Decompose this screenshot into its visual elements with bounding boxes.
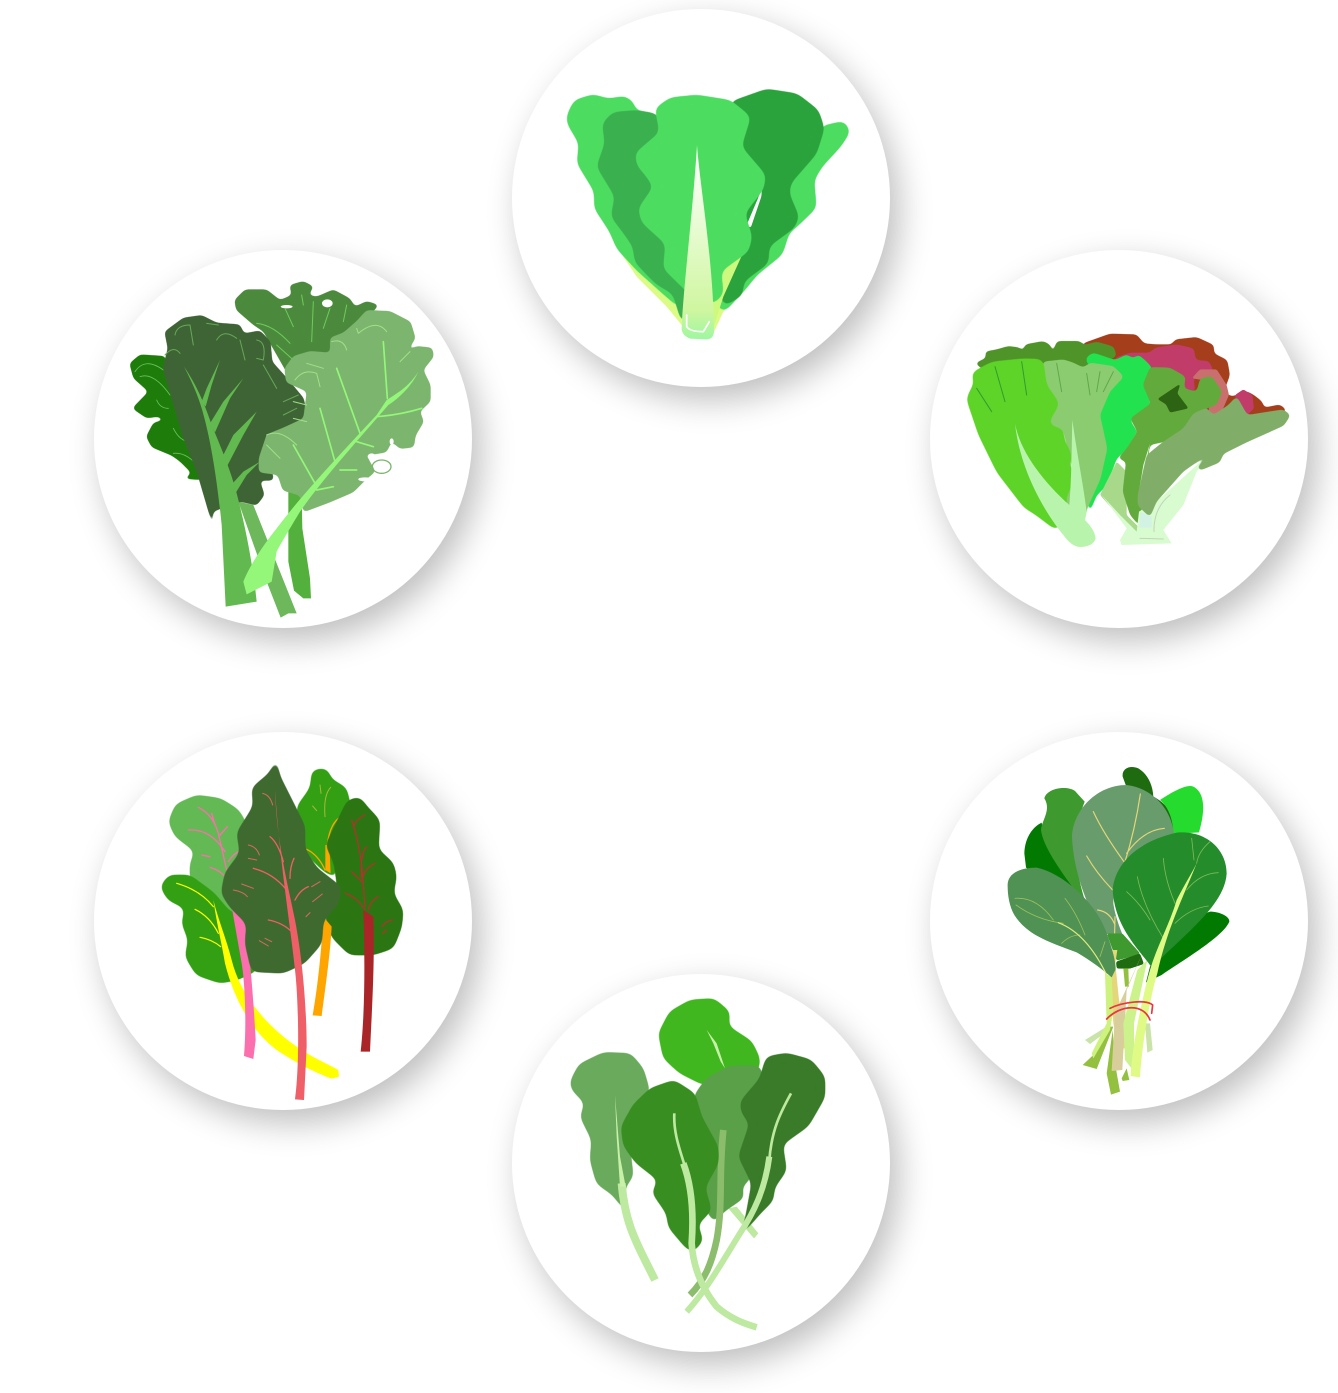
circle background (930, 732, 1308, 1110)
panel: romaine lettuce (512, 9, 890, 387)
panel: mixed leaf lettuce (930, 250, 1308, 628)
icon: romaine lettuce (567, 89, 851, 339)
circle background (930, 250, 1308, 628)
circle background (94, 732, 472, 1110)
panel: arugula (512, 974, 890, 1352)
icon: kale (90, 245, 434, 618)
icon: mixed leaf lettuce (966, 334, 1291, 547)
circle background (94, 250, 472, 628)
panel: rainbow chard (94, 732, 472, 1110)
circle background (512, 9, 890, 387)
panel: spinach bunch (930, 732, 1308, 1110)
icon: spinach bunch (1008, 767, 1229, 1095)
panel: kale (90, 245, 472, 628)
icon: arugula (570, 998, 825, 1327)
icon: rainbow chard (160, 755, 404, 1100)
circle background (512, 974, 890, 1352)
